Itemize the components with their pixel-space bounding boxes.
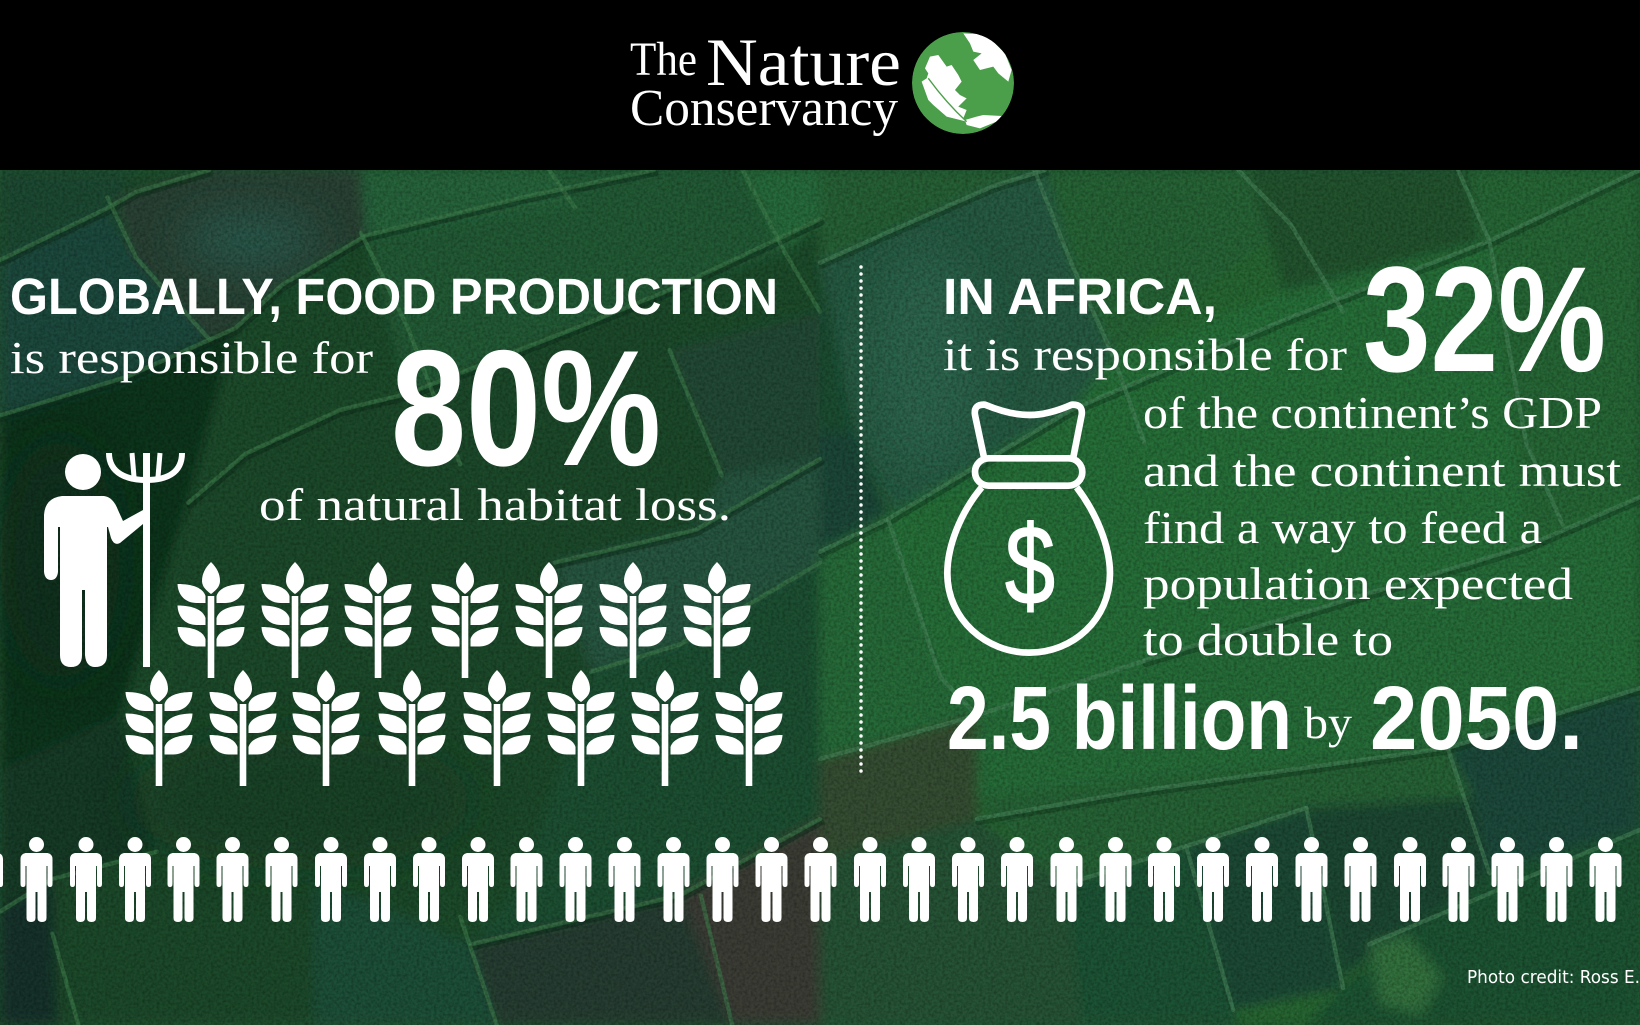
paragraph: continent GDP and population: and the continent must <box>1143 445 1621 496</box>
statistic: 2.5 billion by 2050: 2050. <box>1370 669 1583 769</box>
text: of natural habitat loss: of natural habitat loss. <box>259 479 731 530</box>
logo globe with oak leaves <box>912 32 1014 134</box>
paragraph: continent GDP and population: of the continent’s GDP <box>1143 387 1602 438</box>
logo wordmark: The Nature Conservancy: Nature <box>706 24 901 100</box>
text: it is responsible for: it is responsible for <box>943 329 1347 380</box>
crop icons: wheat stalks <box>126 562 782 786</box>
paragraph: continent GDP and population: population expected <box>1143 558 1573 609</box>
icon: money bag <box>947 405 1110 653</box>
statistic: 2.5 billion by 2050: 2.5 billion <box>947 669 1292 769</box>
icon: farmer with pitchfork <box>44 453 182 667</box>
header band <box>0 0 1640 170</box>
logo wordmark: The Nature Conservancy: Conservancy <box>630 80 898 137</box>
logo wordmark: The Nature Conservancy <box>630 24 901 137</box>
statistic: 2.5 billion by 2050 <box>947 669 1583 769</box>
paragraph: continent GDP and population <box>1143 387 1621 665</box>
dotted divider <box>859 267 863 776</box>
big number: 80%: 80% <box>391 316 661 500</box>
heading: globally, food production: GLOBALLY, FOOD PRODUCTION <box>10 268 778 325</box>
paragraph: continent GDP and population: to double to <box>1143 614 1393 665</box>
heading: in africa: IN AFRICA, <box>943 268 1217 325</box>
row of people icons <box>0 837 1622 922</box>
paragraph: continent GDP and population: find a way to feed a <box>1143 502 1542 553</box>
logo wordmark: The Nature Conservancy: The <box>630 33 697 86</box>
statistic: 2.5 billion by 2050: by <box>1304 697 1352 748</box>
text: is responsible for: is responsible for <box>10 332 373 383</box>
icon: money bag: $ <box>1005 503 1055 628</box>
